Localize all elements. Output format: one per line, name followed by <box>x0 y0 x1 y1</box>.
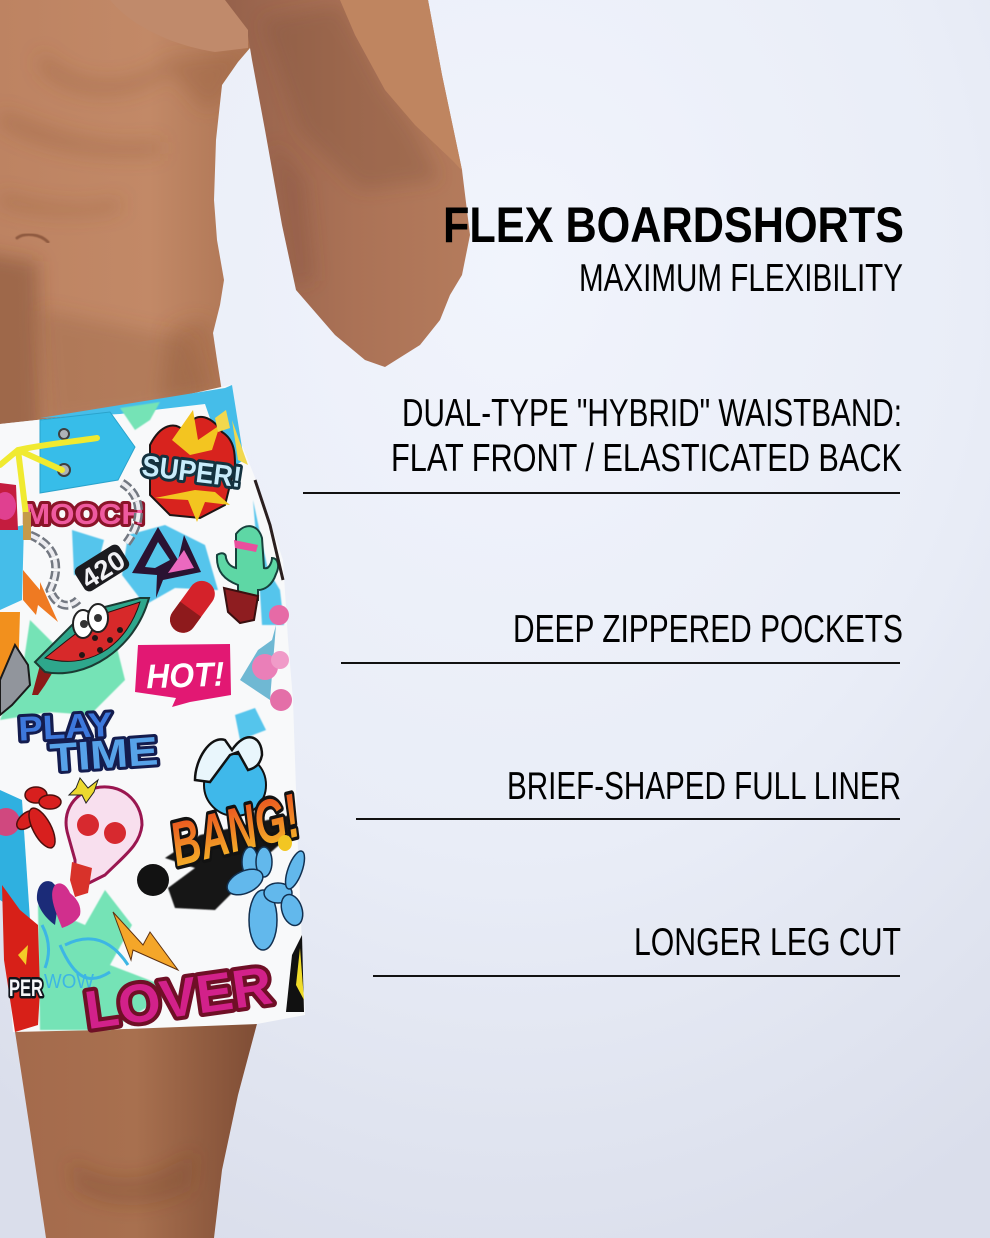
model illustration <box>0 0 470 1238</box>
eyelets <box>58 429 70 476</box>
torso <box>0 0 250 424</box>
feature: leg cut: LONGER LEG CUT <box>634 921 901 964</box>
navel <box>17 235 48 242</box>
title: FLEX BOARDSHORTS <box>443 197 904 253</box>
sticker: super burst <box>140 410 243 522</box>
sticker: right splat and smiley <box>286 935 304 1012</box>
sticker: mooch: MOOCH <box>24 499 144 531</box>
drawstring aglet <box>23 512 31 540</box>
upper arm lit area <box>340 0 466 175</box>
sticker: chain and 420: 420 <box>76 545 131 595</box>
sticker: lightning left <box>23 570 58 622</box>
sticker: sugar skull <box>66 778 142 897</box>
sticker: bang <box>137 737 306 910</box>
heading block <box>443 197 904 300</box>
waistband flap <box>40 412 135 493</box>
forearm shading <box>274 0 462 278</box>
sticker: play time: PLAY <box>17 706 114 749</box>
chest and abdominal shading <box>0 50 246 440</box>
lower leg <box>14 1020 258 1238</box>
sticker: watermelon <box>32 598 149 695</box>
zip pocket edge <box>255 480 283 580</box>
sticker: blue balloon dog <box>223 847 308 950</box>
sticker: swoosh lettering: WOW <box>44 971 94 993</box>
knee shading <box>73 1161 184 1206</box>
sticker: red burst lower left <box>2 885 43 1032</box>
sticker: swoosh lettering <box>42 925 128 993</box>
sticker: roses <box>240 605 292 711</box>
sticker: capsule <box>165 576 220 638</box>
left panel colours <box>0 525 24 610</box>
sticker: super burst: SUPER! <box>140 450 243 494</box>
blue splash behind mountains and capsule <box>72 500 284 740</box>
sticker: lips left <box>0 483 18 530</box>
sticker: mountains <box>132 527 201 598</box>
forearm <box>215 0 470 367</box>
sticker: bang: BANG! <box>164 782 306 880</box>
sticker: hot <box>135 644 231 707</box>
lower belly hair <box>0 250 42 440</box>
sticker: red burst lower left: PER <box>9 975 43 1002</box>
sticker: cactus <box>217 526 278 623</box>
sticker: play time <box>17 706 159 781</box>
chest under arm <box>110 0 248 52</box>
waistband <box>40 385 244 470</box>
sticker: flower left <box>0 808 20 836</box>
yellow note <box>215 410 248 465</box>
sticker: left fly halftone and disco ball <box>0 612 30 715</box>
sticker: hearts <box>37 881 80 928</box>
sticker: lightning <box>113 912 178 970</box>
sticker: play time: TIME <box>49 729 159 781</box>
sticker: lover: LOVER <box>81 955 276 1041</box>
sticker: red balloon dog <box>13 787 61 852</box>
shorts base <box>0 385 305 1032</box>
boardshorts <box>0 385 308 1041</box>
mint splashes <box>0 402 175 1030</box>
drawstring <box>0 438 97 515</box>
sticker: chain and 420 <box>30 483 139 605</box>
feature: waistband <box>303 392 902 494</box>
sticker: hot: HOT! <box>146 656 225 696</box>
